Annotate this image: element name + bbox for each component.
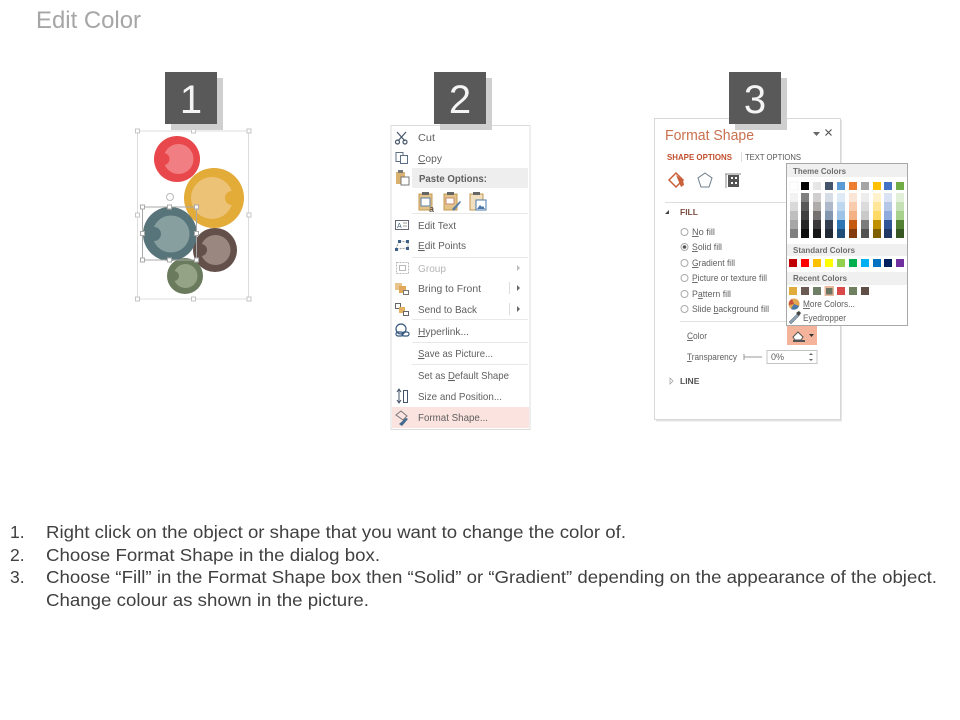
more colors item: More Colors... xyxy=(803,299,855,309)
fill radio options: Pattern fill xyxy=(692,289,731,299)
instruction list: 3. xyxy=(10,567,25,587)
icon: fill bucket xyxy=(669,173,684,187)
instruction list: 1. xyxy=(10,522,25,542)
step 3 panel: format shape pane xyxy=(654,72,908,422)
standard colors heading: Standard Colors xyxy=(793,245,855,255)
icon: edit points xyxy=(395,240,409,251)
color row xyxy=(687,326,817,345)
menu item labels: Save as Picture... xyxy=(418,348,493,360)
teal selected circle xyxy=(140,194,198,262)
pane close controls xyxy=(813,130,832,136)
pane background xyxy=(654,118,842,422)
eyedropper item xyxy=(789,311,846,324)
fill section heading: FILL xyxy=(680,207,698,217)
standard color swatches xyxy=(789,259,904,267)
instruction list: 2. xyxy=(10,545,25,565)
fill radio options: Solid fill xyxy=(692,242,722,252)
format shape highlight xyxy=(392,407,529,428)
selection box xyxy=(136,129,251,301)
fill radio options: No fill xyxy=(692,227,715,237)
pane tabs: TEXT OPTIONS xyxy=(745,152,801,162)
icon: pentagon xyxy=(698,173,712,187)
menu item labels: Send to Back xyxy=(418,304,478,316)
menu item labels xyxy=(418,132,509,424)
theme color swatches xyxy=(790,182,904,238)
line section heading: LINE xyxy=(680,376,700,386)
pane tabs xyxy=(667,152,801,162)
fill radio options: Picture or texture fill xyxy=(692,273,767,283)
color row: Color xyxy=(687,331,707,341)
pane heading: Format Shape xyxy=(665,127,754,144)
more colors item xyxy=(788,298,855,310)
recent colors heading xyxy=(787,272,907,285)
menu background xyxy=(391,126,530,430)
transparency row: Transparency xyxy=(687,352,737,362)
instruction list: Change colour as shown in the picture. xyxy=(46,590,369,610)
icon: scissors xyxy=(396,132,407,144)
theme colors heading: Theme Colors xyxy=(793,166,846,176)
menu item labels: Edit Points xyxy=(418,240,466,252)
green circle xyxy=(167,258,203,294)
icon: layout xyxy=(725,174,741,188)
badge 2: 2 xyxy=(449,78,471,122)
menu item labels: Set as Default Shape xyxy=(418,370,509,382)
icon: group xyxy=(396,262,408,274)
badge 1 xyxy=(165,72,223,130)
icon: edit text xyxy=(396,220,408,230)
icon: size and position xyxy=(397,389,408,403)
instruction list: Choose “Fill” in the Format Shape box then “Solid” or “Gradient” depending on the appearance of the object. xyxy=(46,567,937,587)
fill radio options xyxy=(681,227,769,314)
instruction list: Choose Format Shape in the dialog box. xyxy=(46,545,380,565)
menu item labels: Paste Options: xyxy=(419,173,487,185)
icon: paste option buttons: a xyxy=(429,204,434,214)
line section heading xyxy=(670,376,700,386)
submenu arrows xyxy=(509,265,520,315)
paste options highlight xyxy=(412,168,528,188)
red circle xyxy=(154,136,200,182)
icon: bring to front xyxy=(395,283,408,294)
menu item labels: Edit Text xyxy=(418,220,456,232)
badge 3: 3 xyxy=(744,78,766,122)
step 2 panel: context menu xyxy=(391,72,530,430)
transparency row: 0% xyxy=(771,352,784,362)
transparency row xyxy=(687,350,817,364)
menu item labels: Group xyxy=(418,263,446,275)
eyedropper item: Eyedropper xyxy=(803,313,846,323)
palette background xyxy=(786,164,908,326)
menu item labels: Cut xyxy=(418,132,435,144)
icon: format shape xyxy=(396,411,408,426)
badge 3 xyxy=(729,72,787,130)
recent color swatches xyxy=(789,286,869,296)
color dropdown palette xyxy=(786,164,908,326)
instruction list xyxy=(10,522,937,610)
icon: send to back xyxy=(396,304,408,316)
theme colors heading xyxy=(787,164,907,177)
icon: paste option buttons xyxy=(419,192,486,214)
menu item labels: Hyperlink... xyxy=(418,326,469,338)
title: Edit Color xyxy=(36,7,141,34)
recent colors heading: Recent Colors xyxy=(793,273,847,283)
menu item labels: Bring to Front xyxy=(418,283,481,295)
standard colors heading xyxy=(787,244,907,256)
fill radio options: Slide background fill xyxy=(692,304,769,314)
pane tabs: SHAPE OPTIONS xyxy=(667,152,732,162)
step 1 panel: selected circles xyxy=(136,72,251,301)
badge 2 xyxy=(434,72,492,130)
badge 1: 1 xyxy=(180,78,202,122)
fill section heading xyxy=(665,207,698,217)
icon: hyperlink xyxy=(396,324,409,336)
menu item labels: Copy xyxy=(418,153,443,165)
icon: edit text: A xyxy=(397,223,402,230)
instruction list: Right click on the object or shape that you want to change the color of. xyxy=(46,522,626,542)
menu item labels: Format Shape... xyxy=(418,412,488,424)
menu item labels: Size and Position... xyxy=(418,391,502,403)
yellow circle xyxy=(184,168,244,228)
fill radio options: Gradient fill xyxy=(692,258,735,268)
brown circle xyxy=(193,228,237,272)
icon: paste xyxy=(396,170,409,185)
icon: copy xyxy=(396,152,408,164)
